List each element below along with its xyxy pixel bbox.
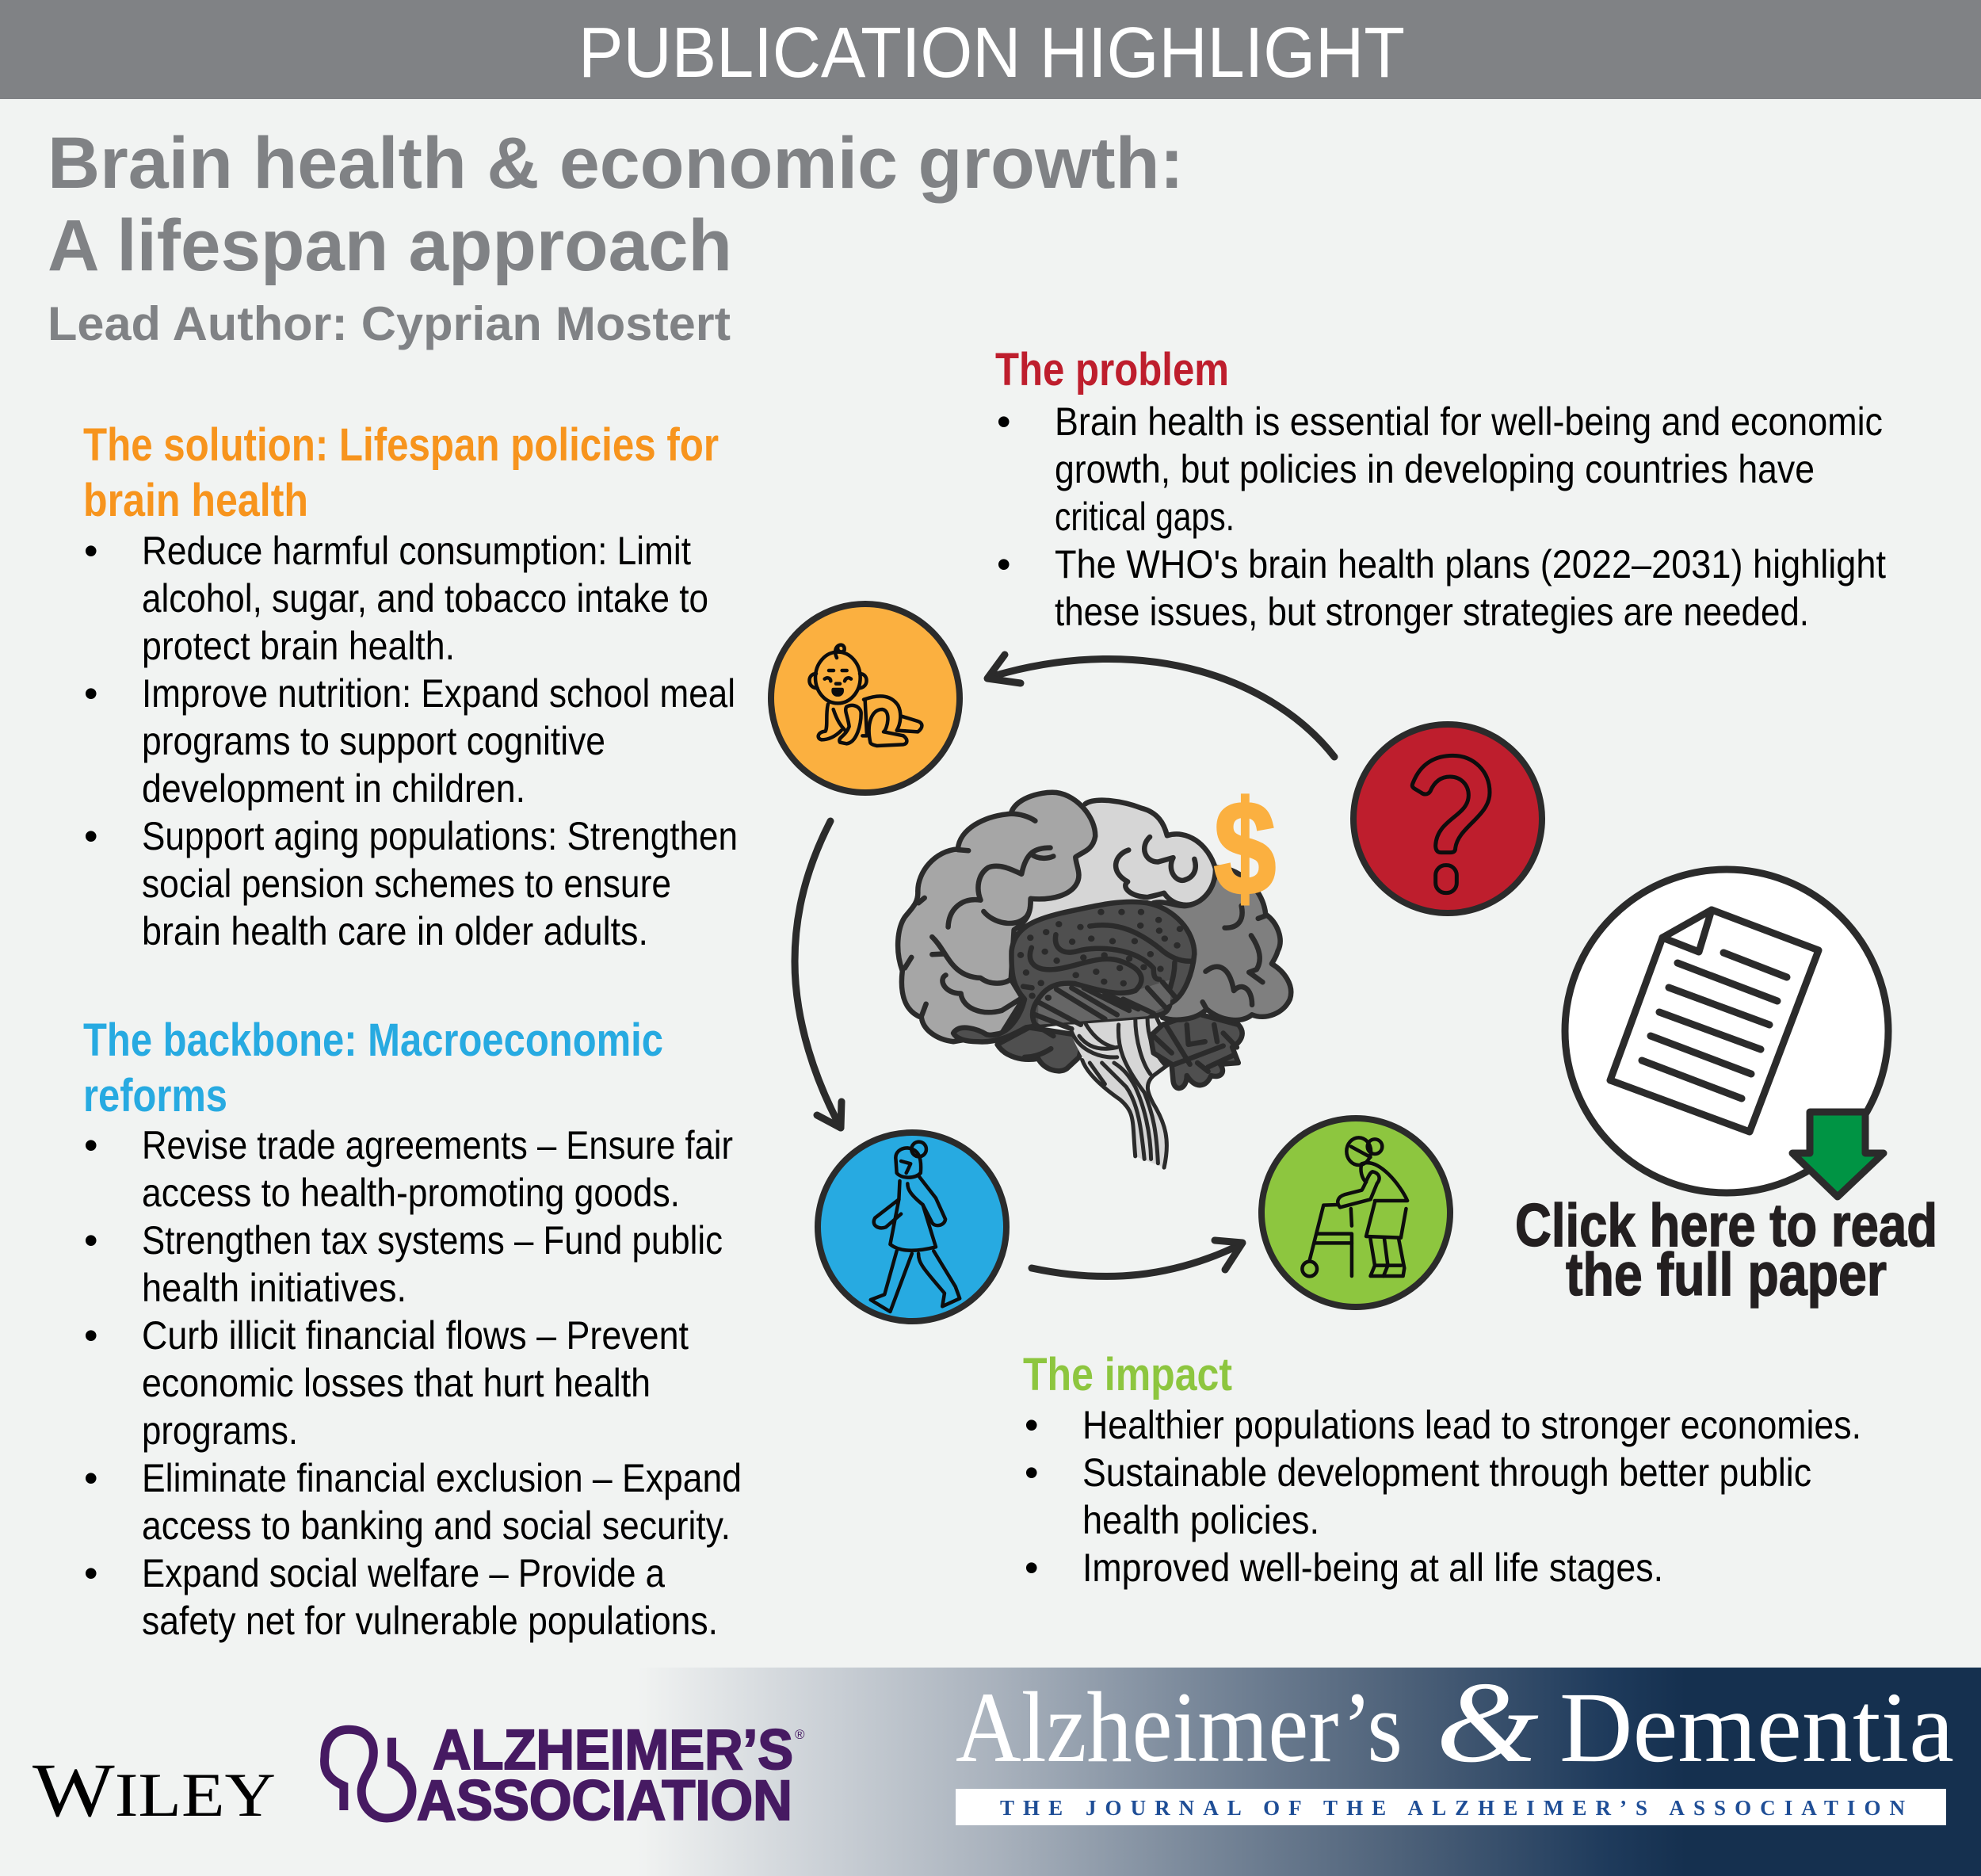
backbone bullet list: access to banking and social security. xyxy=(142,1503,731,1548)
heading: the solution: The solution: Lifespan policies for xyxy=(83,419,719,471)
heading: the backbone xyxy=(83,1014,663,1121)
icon: green circle with older adult and walker xyxy=(1262,1118,1450,1307)
journal masthead: Dementia xyxy=(1559,1672,1954,1783)
backbone bullet list: • xyxy=(84,1123,98,1167)
backbone bullet list: Revise trade agreements – Ensure fair xyxy=(142,1123,733,1167)
brain stem xyxy=(1071,1016,1169,1167)
impact bullet list: • xyxy=(1025,1450,1039,1495)
header banner xyxy=(0,0,1981,99)
problem bullet list: critical gaps. xyxy=(1055,495,1235,539)
backbone bullet list: economic losses that hurt health xyxy=(142,1361,651,1405)
solution bullet list: Support aging populations: Strengthen xyxy=(142,814,738,858)
backbone bullet list: Curb illicit financial flows – Prevent xyxy=(142,1313,689,1358)
solution bullet list xyxy=(84,529,738,953)
impact bullet list: • xyxy=(1025,1546,1039,1590)
solution bullet list: social pension schemes to ensure xyxy=(142,862,671,906)
backbone bullet list xyxy=(84,1123,742,1643)
title xyxy=(48,123,1184,286)
impact bullet list xyxy=(1025,1403,1861,1590)
solution bullet list: development in children. xyxy=(142,766,525,811)
backbone bullet list: Strengthen tax systems – Fund public xyxy=(142,1218,723,1263)
icon: blue circle with walking adult xyxy=(818,1133,1006,1321)
journal masthead: THE JOURNAL OF THE ALZHEIMER’S ASSOCIATION xyxy=(1000,1796,1905,1820)
lead author: Lead Author: Cyprian Mostert xyxy=(48,297,731,350)
backbone bullet list: Expand social welfare – Provide a xyxy=(142,1551,665,1595)
backbone bullet list: Eliminate financial exclusion – Expand xyxy=(142,1456,742,1500)
solution bullet list: • xyxy=(84,814,98,858)
heading: the impact: The impact xyxy=(1023,1349,1232,1400)
solution bullet list: Reduce harmful consumption: Limit xyxy=(142,529,691,573)
impact bullet list: Improved well-being at all life stages. xyxy=(1082,1546,1663,1590)
icon: red circle with question mark xyxy=(1353,724,1542,913)
heading: the backbone: The backbone: Macroeconomic xyxy=(83,1014,663,1066)
document xyxy=(1610,910,1819,1132)
solution bullet list: protect brain health. xyxy=(142,624,455,668)
icon: orange circle with crawling baby xyxy=(771,604,960,793)
title: A lifespan approach xyxy=(48,205,732,286)
solution bullet list: programs to support cognitive xyxy=(142,719,605,763)
heading: the solution xyxy=(83,419,719,526)
backbone bullet list: health initiatives. xyxy=(142,1266,407,1310)
backbone bullet list: safety net for vulnerable populations. xyxy=(142,1599,718,1643)
logo: Alzheimer's Association xyxy=(325,1719,805,1832)
hippocampus ribs xyxy=(1035,982,1174,1029)
title: Brain health & economic growth: xyxy=(48,123,1184,204)
heading: the backbone: reforms xyxy=(83,1070,227,1121)
backbone bullet list: • xyxy=(84,1313,98,1358)
icon: paper document with download arrow xyxy=(1565,869,1888,1197)
call to action: read the full paper: the full paper xyxy=(1566,1241,1887,1309)
journal masthead: & xyxy=(1436,1658,1539,1786)
solution bullet list: Improve nutrition: Expand school meal xyxy=(142,671,735,716)
journal masthead xyxy=(956,1658,1954,1825)
backbone bullet list: • xyxy=(84,1551,98,1595)
cerebellum xyxy=(1151,1014,1242,1088)
impact bullet list: • xyxy=(1025,1403,1039,1447)
call to action: read the full paper xyxy=(1515,1192,1937,1309)
impact bullet list: Healthier populations lead to stronger economies. xyxy=(1082,1403,1861,1447)
heading: the problem: The problem xyxy=(995,344,1229,395)
footer band xyxy=(638,1668,1981,1876)
panel: the backbone xyxy=(83,1014,742,1643)
logo: Alzheimer's Association: ASSOCIATION xyxy=(417,1770,792,1832)
impact bullet list: health policies. xyxy=(1082,1498,1319,1542)
speckle dots xyxy=(1017,909,1183,1001)
icon: dollar sign: $ xyxy=(1214,774,1276,923)
header banner: PUBLICATION HIGHLIGHT xyxy=(578,13,1405,93)
arrow: problem to child xyxy=(987,655,1334,757)
journal masthead: Alzheimer’s xyxy=(956,1672,1403,1783)
heading: the solution: brain health xyxy=(83,475,308,526)
problem bullet list: The WHO's brain health plans (2022–2031) highlight xyxy=(1055,542,1886,586)
lower brain xyxy=(998,1027,1084,1071)
problem bullet list: • xyxy=(997,542,1011,586)
panel: the problem xyxy=(995,344,1886,634)
document circle xyxy=(1565,869,1888,1193)
solution bullet list: • xyxy=(84,529,98,573)
impact bullet list: Sustainable development through better public xyxy=(1082,1450,1811,1495)
logo: Alzheimer's Association: ALZHEIMER’S xyxy=(433,1719,793,1782)
temporal lobe xyxy=(953,902,1194,1041)
backbone bullet list: • xyxy=(84,1456,98,1500)
problem bullet list: these issues, but stronger strategies are needed. xyxy=(1055,590,1809,634)
illustration: brain xyxy=(898,793,1291,1167)
logo symbol xyxy=(325,1729,412,1818)
backbone bullet list: • xyxy=(84,1218,98,1263)
panel: the solution xyxy=(83,419,738,953)
problem bullet list xyxy=(997,399,1886,634)
problem bullet list: Brain health is essential for well-being and economic xyxy=(1055,399,1883,444)
journal subtitle bar xyxy=(956,1789,1946,1825)
backbone bullet list: programs. xyxy=(142,1408,298,1453)
panel: the impact xyxy=(1023,1349,1861,1590)
parietal lobe xyxy=(1014,800,1216,937)
frontal lobe xyxy=(898,793,1095,1041)
download arrow xyxy=(1792,1112,1884,1197)
arrow: child to adult xyxy=(795,821,842,1128)
backbone bullet list: access to health-promoting goods. xyxy=(142,1171,680,1215)
logo: Alzheimer's Association: ® xyxy=(795,1727,805,1742)
solution bullet list: brain health care in older adults. xyxy=(142,909,648,953)
logo: Wiley: WILEY xyxy=(32,1748,276,1832)
solution bullet list: • xyxy=(84,671,98,716)
arrow: adult to older adult xyxy=(1032,1240,1242,1276)
problem bullet list: • xyxy=(997,399,1011,444)
solution bullet list: alcohol, sugar, and tobacco intake to xyxy=(142,576,708,621)
problem bullet list: growth, but policies in developing countries have xyxy=(1055,447,1815,491)
occipital lobe xyxy=(1154,868,1291,1020)
